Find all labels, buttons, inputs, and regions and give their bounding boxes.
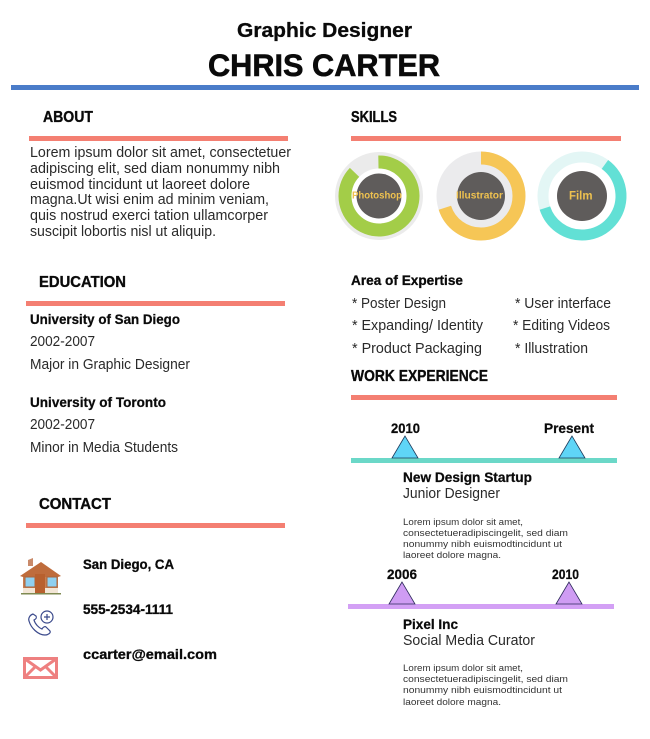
marker: present: Present xyxy=(544,421,595,436)
icon: envelope xyxy=(24,658,56,678)
panel: contact xyxy=(20,496,285,678)
job: new design startup xyxy=(403,469,568,561)
panel: area of expertise xyxy=(351,272,611,357)
job: pixel inc: laoreet dolore magna. xyxy=(403,697,501,708)
timeline: pixel inc xyxy=(348,567,614,609)
job: pixel inc: Lorem ipsum dolor sit amet, xyxy=(403,663,523,674)
job: new design startup: laoreet dolore magna. xyxy=(403,550,501,561)
icon: phone xyxy=(29,611,53,635)
about text block: quis nostrud exerci tation ullamcorper xyxy=(30,208,268,224)
text: phone number: 555-2534-1111 xyxy=(83,602,173,617)
about text block: magna.Ut wisi enim ad minim veniam, xyxy=(30,192,269,208)
job title: Graphic Designer xyxy=(237,20,412,42)
heading: skills: SKILLS xyxy=(351,109,397,126)
job: pixel inc: consectetueradipiscingelit, sed diam xyxy=(403,674,568,685)
job: pixel inc: Pixel Inc xyxy=(403,616,458,632)
heading: contact: CONTACT xyxy=(39,496,112,513)
timeline: new design startup xyxy=(351,421,617,463)
chart: film ring: Film xyxy=(569,190,592,202)
panel: skills xyxy=(335,109,636,250)
expertise list xyxy=(352,296,611,357)
marker: 2010: 2010 xyxy=(552,567,579,582)
expertise list: * User interface xyxy=(515,296,611,312)
education entry: san diego xyxy=(30,311,190,373)
name: CHRIS CARTER xyxy=(208,47,440,83)
about text block: suscipit lobortis nisl ut aliquip. xyxy=(30,224,216,240)
job: new design startup: Lorem ipsum dolor sit amet, xyxy=(403,517,523,528)
job: new design startup: nonummy nibh euismodtincidunt ut xyxy=(403,539,562,550)
job: new design startup: Junior Designer xyxy=(403,486,500,502)
marker: 2010 xyxy=(391,421,420,458)
heading: about: ABOUT xyxy=(43,109,93,126)
job: new design startup: New Design Startup xyxy=(403,469,532,485)
about text block: adipiscing elit, sed diam nonummy nibh xyxy=(30,161,280,177)
expertise list: * Illustration xyxy=(515,341,588,357)
text: email: ccarter@email.com xyxy=(83,647,217,662)
education entry: toronto xyxy=(30,394,178,456)
header xyxy=(11,20,639,90)
marker: 2010: 2010 xyxy=(391,421,420,436)
chart: illustrator ring: Illustrator xyxy=(456,190,503,202)
heading: work experience: WORK EXPERIENCE xyxy=(351,368,488,385)
icon: house xyxy=(20,558,61,594)
panel: education xyxy=(26,274,285,456)
marker: 2006: 2006 xyxy=(387,567,417,582)
panel: about xyxy=(29,109,291,240)
text: address: San Diego, CA xyxy=(83,557,174,572)
job: pixel inc xyxy=(403,616,568,708)
education entry: toronto: Minor in Media Students xyxy=(30,440,178,456)
chart: film ring xyxy=(528,142,636,250)
education entry: toronto: University of Toronto xyxy=(30,394,166,410)
expertise list: * Product Packaging xyxy=(352,341,482,357)
chart: photoshop ring xyxy=(335,152,423,240)
chart: photoshop ring: Photoshop xyxy=(352,190,402,202)
education entry: san diego: 2002-2007 xyxy=(30,334,95,350)
heading: area of expertise: Area of Expertise xyxy=(351,272,463,288)
education entry: toronto: 2002-2007 xyxy=(30,417,95,433)
education entry: san diego: University of San Diego xyxy=(30,311,180,327)
marker: 2006 xyxy=(387,567,417,604)
expertise list: * Editing Videos xyxy=(513,318,610,334)
marker: 2010 xyxy=(552,567,582,604)
expertise list: * Expanding/ Identity xyxy=(352,318,484,334)
expertise list: * Poster Design xyxy=(352,296,446,312)
panel: work experience xyxy=(348,368,617,708)
chart: illustrator ring xyxy=(436,152,526,240)
job: pixel inc: nonummy nibh euismodtincidunt ut xyxy=(403,685,562,696)
about text block: Lorem ipsum dolor sit amet, consectetuer xyxy=(30,145,291,161)
job: new design startup: consectetueradipiscingelit, sed diam xyxy=(403,528,568,539)
education entry: san diego: Major in Graphic Designer xyxy=(30,357,190,373)
about text block: euismod tincidunt ut laoreet dolore xyxy=(30,177,250,193)
marker: present xyxy=(544,421,595,458)
job: pixel inc: Social Media Curator xyxy=(403,633,535,649)
heading: education: EDUCATION xyxy=(39,274,126,291)
about text block xyxy=(30,145,291,240)
